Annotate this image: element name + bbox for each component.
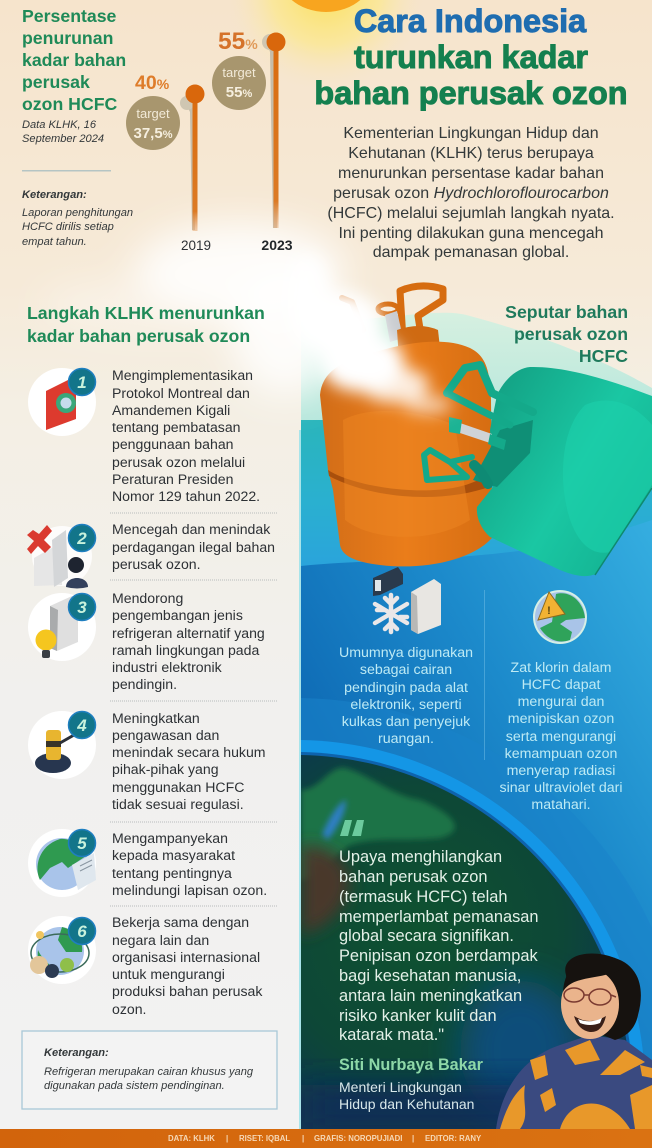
portrait: minister bbox=[496, 953, 652, 1129]
step 4 bbox=[28, 710, 266, 812]
text: Peraturan Presiden bbox=[112, 471, 233, 487]
quote text: bagi kesehatan manusia, bbox=[339, 967, 521, 985]
quote text: katarak mata." bbox=[339, 1026, 444, 1044]
chart heading bbox=[22, 6, 126, 114]
text: ozon. bbox=[112, 1001, 146, 1017]
note box: refrigeran: digunakan pada sistem pendinginan. bbox=[44, 1080, 225, 1092]
quote text: antara lain meningkatkan bbox=[339, 987, 522, 1005]
quote author bbox=[339, 1056, 484, 1112]
text: usage of HCFC: ruangan. bbox=[378, 731, 434, 747]
target badge 55%: target bbox=[222, 65, 256, 80]
chart note: Keterangan: bbox=[22, 189, 87, 201]
intro paragraph bbox=[327, 125, 615, 261]
text: usage of HCFC: sebagai cairan bbox=[360, 662, 452, 678]
quote text: memperlambat pemanasan bbox=[339, 908, 539, 926]
gas cloud from the orange cylinder bbox=[286, 255, 452, 414]
text: tentang pembatasan bbox=[112, 419, 241, 435]
icon: globe and leaflet bbox=[28, 829, 96, 897]
illustration: green cylinder bbox=[424, 365, 652, 576]
icon: gavel: 4 bbox=[76, 716, 87, 735]
footer credits: GRAFIS: NOROPUJIADI bbox=[314, 1134, 402, 1143]
chart heading: penurunan bbox=[22, 28, 113, 48]
target badge 37,5%: 37,5% bbox=[134, 125, 173, 142]
bar: 2023 bbox=[212, 28, 293, 253]
title: bahan perusak ozon bbox=[314, 75, 628, 111]
step 5 bbox=[28, 829, 267, 898]
quote text: bahan perusak ozon bbox=[339, 868, 488, 886]
text: organisasi internasional bbox=[112, 949, 260, 965]
value 55%: 55% bbox=[218, 28, 258, 55]
step 2 bbox=[27, 521, 275, 588]
chart heading: kadar bahan bbox=[22, 50, 126, 70]
text: tentang pentingnya bbox=[112, 865, 232, 881]
text: produksi bahan perusak bbox=[112, 983, 263, 999]
icon: gavel bbox=[28, 711, 96, 779]
text: chlorine effect: menyerap radiasi bbox=[507, 763, 615, 779]
section heading bbox=[27, 303, 265, 346]
text: pengawasan dan bbox=[112, 727, 219, 743]
footer credits: | bbox=[302, 1134, 304, 1143]
icon: treaty book: 1 bbox=[77, 373, 87, 392]
title bbox=[314, 3, 628, 111]
icon: earth with warning sign bbox=[533, 590, 587, 644]
text: Amandemen Kigali bbox=[112, 402, 230, 418]
target badge 55% bbox=[212, 56, 266, 110]
text: refrigeran alternatif yang bbox=[112, 625, 265, 641]
footer credits: RISET: IQBAL bbox=[239, 1134, 290, 1143]
text: usage of HCFC bbox=[339, 645, 473, 747]
text: chlorine effect: matahari. bbox=[531, 797, 591, 813]
section heading: kadar bahan perusak ozon bbox=[27, 326, 250, 346]
panel: decline chart bbox=[22, 6, 293, 253]
chart note: HCFC dirilis setiap bbox=[22, 221, 114, 233]
intro paragraph: Kehutanan (KLHK) terus berupaya bbox=[348, 145, 594, 162]
background: right column bands bbox=[301, 313, 652, 1129]
icon: treaty book bbox=[28, 368, 96, 436]
quote author: Siti Nurbaya Bakar bbox=[339, 1056, 484, 1074]
quote text: global secara signifikan. bbox=[339, 927, 514, 945]
text: Mengimplementasikan bbox=[112, 367, 253, 383]
text bbox=[112, 590, 265, 692]
text: tidak sesuai regulasi. bbox=[112, 796, 244, 812]
text: chlorine effect: HCFC dapat bbox=[522, 677, 600, 693]
icon: globe and leaflet: 5 bbox=[77, 834, 87, 853]
text: chlorine effect: sinar ultraviolet dari bbox=[499, 780, 623, 796]
text: perusak ozon. bbox=[112, 556, 201, 572]
text: chlorine effect bbox=[499, 660, 623, 813]
text: melindungi lapisan ozon. bbox=[112, 882, 267, 898]
text: negara lain dan bbox=[112, 932, 209, 948]
data source bbox=[22, 119, 104, 145]
value 40%: 40% bbox=[135, 72, 170, 94]
text bbox=[112, 830, 267, 898]
section heading: seputar HCFC: HCFC bbox=[579, 346, 628, 366]
quote author: Menteri Lingkungan bbox=[339, 1079, 462, 1095]
year 2023: 2023 bbox=[261, 237, 293, 253]
text bbox=[112, 914, 263, 1017]
text: Protokol Montreal dan bbox=[112, 385, 250, 401]
chart heading: ozon HCFC bbox=[22, 94, 118, 114]
icon: sun with glow bbox=[226, 0, 426, 90]
valve and handles bbox=[424, 365, 533, 484]
icon: globe and cooperation bbox=[28, 916, 96, 984]
text: usage of HCFC: Umumnya digunakan bbox=[339, 645, 473, 661]
intro paragraph: Ini penting dilakukan guna mencegah bbox=[338, 225, 604, 242]
text: Mencegah dan menindak bbox=[112, 521, 271, 537]
bar: 2019 bbox=[126, 72, 211, 253]
chart heading: Persentase bbox=[22, 6, 117, 26]
text bbox=[112, 521, 275, 572]
target badge 37,5%: target bbox=[136, 106, 170, 121]
text: menggunakan HCFC bbox=[112, 779, 244, 795]
footer credits: | bbox=[226, 1134, 228, 1143]
text: pihak-pihak yang bbox=[112, 761, 219, 777]
text: usage of HCFC: pendingin pada alat bbox=[344, 680, 468, 696]
title: Cara Indonesia bbox=[354, 3, 587, 39]
text: pendingin. bbox=[112, 676, 177, 692]
clouds of gas behind the chart bbox=[40, 222, 345, 395]
step 1 bbox=[28, 367, 260, 504]
step 3 bbox=[28, 590, 265, 692]
icon: fridge and light bulb bbox=[28, 593, 96, 661]
section heading: seputar HCFC: perusak ozon bbox=[514, 324, 628, 344]
text: perusak ozon melalui bbox=[112, 454, 245, 470]
text: untuk mengurangi bbox=[112, 966, 225, 982]
text: penggunaan bahan bbox=[112, 436, 234, 452]
text: Meningkatkan bbox=[112, 710, 200, 726]
intro paragraph: dampak pemanasan global. bbox=[373, 244, 569, 261]
footer credits: EDITOR: RANY bbox=[425, 1134, 482, 1143]
icon: illegal trade: 2 bbox=[76, 529, 87, 548]
text: chlorine effect: mengurai dan bbox=[518, 694, 604, 710]
note box: refrigeran: Keterangan: bbox=[44, 1047, 109, 1059]
text: usage of HCFC: kulkas dan penyejuk bbox=[342, 714, 471, 730]
chart note: empat tahun. bbox=[22, 236, 87, 248]
note box: refrigeran bbox=[22, 1031, 277, 1109]
data source: Data KLHK, 16 bbox=[22, 119, 97, 131]
quote mark bbox=[340, 820, 364, 836]
title: turunkan kadar bbox=[354, 39, 588, 75]
icon: air conditioner, snowflake and fridge bbox=[373, 567, 441, 634]
text bbox=[112, 710, 266, 812]
text: pengembangan jenis bbox=[112, 607, 243, 623]
text: chlorine effect: Zat klorin dalam bbox=[511, 660, 611, 676]
step 6 bbox=[28, 914, 263, 1017]
panel: steps by KLHK bbox=[22, 303, 277, 1109]
note box: refrigeran: Refrigeran merupakan cairan khusus yang bbox=[44, 1066, 254, 1078]
text: usage of HCFC: elektronik, seperti bbox=[350, 697, 462, 713]
tank body bbox=[320, 342, 492, 566]
vertical seam between columns bbox=[299, 430, 301, 1129]
data source: September 2024 bbox=[22, 133, 104, 145]
footer credits: DATA: KLHK bbox=[168, 1134, 215, 1143]
chart note bbox=[22, 189, 133, 248]
quote text bbox=[339, 848, 539, 1044]
text: Nomor 129 tahun 2022. bbox=[112, 488, 260, 504]
text: Bekerja sama dengan bbox=[112, 914, 249, 930]
handles and valve bbox=[342, 286, 443, 340]
footer credits: | bbox=[412, 1134, 414, 1143]
text: Mengampanyekan bbox=[112, 830, 228, 846]
text: industri elektronik bbox=[112, 659, 223, 675]
text: Mendorong bbox=[112, 590, 183, 606]
intro paragraph: menurunkan persentase kadar bahan bbox=[338, 165, 604, 182]
text: menindak secara hukum bbox=[112, 744, 266, 760]
section heading: seputar HCFC: Seputar bahan bbox=[505, 302, 628, 322]
section heading: seputar HCFC bbox=[505, 302, 628, 366]
text: chlorine effect: kemampuan ozon bbox=[505, 746, 617, 762]
icon: earth with warning sign: ! bbox=[547, 605, 551, 617]
target badge 37,5% bbox=[126, 96, 180, 150]
intro paragraph: Kementerian Lingkungan Hidup dan bbox=[343, 125, 599, 142]
icon: fridge and light bulb: 3 bbox=[77, 598, 87, 617]
text: chlorine effect: menipiskan ozon bbox=[508, 711, 614, 727]
intro paragraph: perusak ozon Hydrochloroflourocarbon bbox=[333, 185, 609, 202]
section heading: Langkah KLHK menurunkan bbox=[27, 303, 265, 323]
illustration: orange HCFC cylinder bbox=[320, 286, 492, 566]
chart note: Laporan penghitungan bbox=[22, 207, 133, 219]
text: ramah lingkungan pada bbox=[112, 642, 259, 658]
text: kepada masyarakat bbox=[112, 847, 235, 863]
year 2019: 2019 bbox=[181, 238, 211, 253]
quote text: Penipisan ozon berdampak bbox=[339, 947, 538, 965]
quote text: Upaya menghilangkan bbox=[339, 848, 502, 866]
icon: globe and cooperation: 6 bbox=[77, 922, 87, 941]
chart heading: perusak bbox=[22, 72, 90, 92]
quote author: Hidup dan Kehutanan bbox=[339, 1096, 474, 1112]
quote text: (termasuk HCFC) telah bbox=[339, 888, 508, 906]
icon: illegal trade bbox=[27, 524, 96, 588]
intro paragraph: (HCFC) melalui sejumlah langkah nyata. bbox=[327, 205, 615, 222]
target badge 55%: 55% bbox=[226, 84, 252, 101]
text bbox=[112, 367, 260, 504]
text: perdagangan ilegal bahan bbox=[112, 539, 275, 555]
footer credits bbox=[0, 1129, 652, 1148]
quote text: risiko kanker kulit dan bbox=[339, 1007, 497, 1025]
text: chlorine effect: serta mengurangi bbox=[506, 729, 616, 745]
